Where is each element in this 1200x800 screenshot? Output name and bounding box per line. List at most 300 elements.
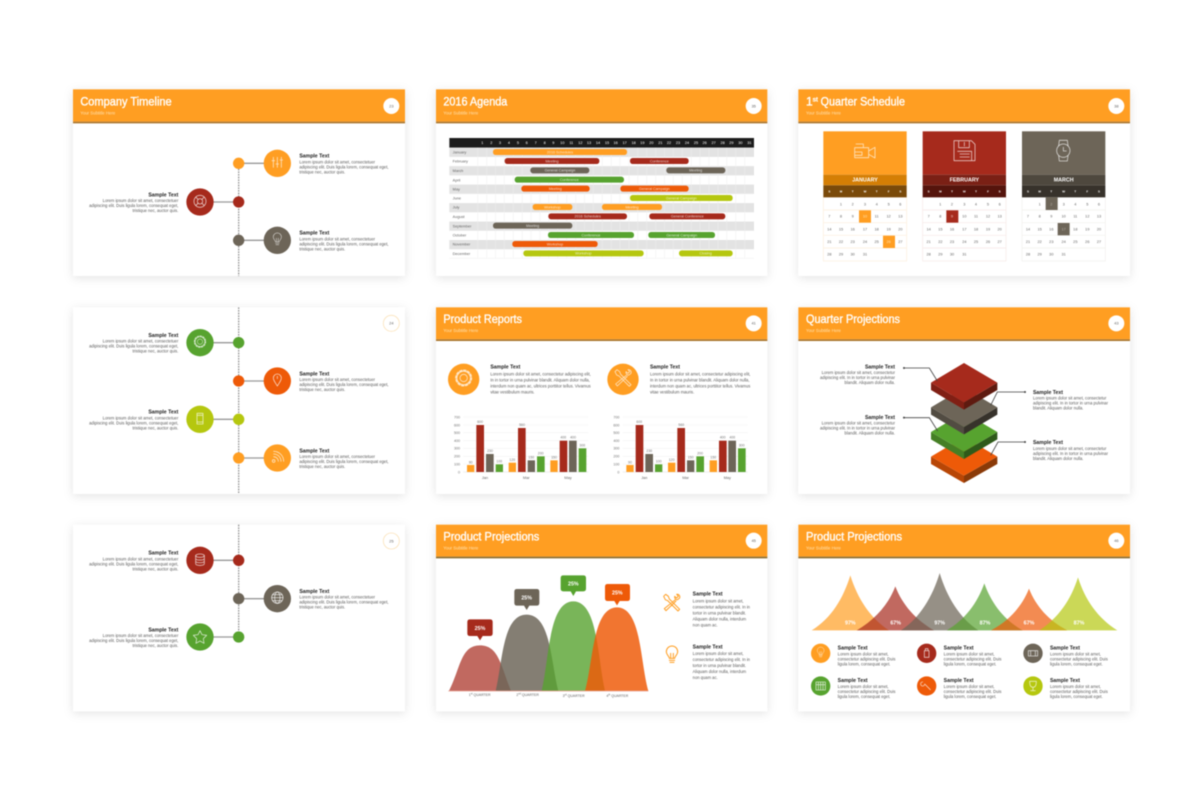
peak chart: 67% — [1024, 621, 1035, 627]
calendar: january: 6 — [899, 202, 901, 206]
gantt day numbers: 25 — [694, 141, 698, 145]
layer: green — [931, 412, 997, 459]
gantt day numbers: 28 — [721, 141, 725, 145]
node: gear: tristique nec, auctor quis. — [132, 349, 178, 354]
gantt day numbers: 24 — [685, 141, 690, 145]
text: layer 2: adipiscing elit. In in tortor in urna pulvinar — [1033, 401, 1109, 406]
calendar: february: 15 — [938, 227, 942, 231]
bar chart right: Mar — [682, 476, 690, 480]
bar chart right: 500 — [613, 431, 619, 435]
bar chart right: May — [724, 476, 731, 480]
text: layer 1: blandit. Aliquam dolor nulla. — [845, 380, 895, 385]
calendar: february: 5 — [987, 202, 989, 206]
feature: bulb icon and text: Sample Text — [693, 644, 723, 650]
calendar: march: 20 — [1097, 227, 1101, 231]
node: life ring: Sample Text — [148, 192, 179, 198]
gantt day numbers: 26 — [703, 141, 707, 145]
gantt month labels: May — [453, 187, 460, 191]
text: layer 3: Lorem ipsum dolor sit amet, consectetur — [822, 421, 895, 426]
item: trophy — [1023, 676, 1108, 699]
gantt month labels: July — [453, 206, 460, 210]
calendar: february: 9 — [951, 215, 953, 219]
calendar: february — [923, 131, 1006, 261]
gantt month labels: February — [453, 160, 468, 164]
node: wifi: adipiscing elit. Duis ligula lorem, consequat eget, — [299, 459, 389, 464]
calendar: january: 28 — [827, 253, 831, 257]
calendar: january: 1 — [840, 202, 842, 206]
feature: gear — [448, 364, 591, 395]
header: product projections: Your Subtitle Here — [443, 545, 479, 550]
calendar: january: 31 — [863, 253, 867, 257]
node: wifi: Lorem ipsum dolor sit amet, consectetuer — [299, 454, 375, 459]
header: 2016 agenda: Your Subtitle Here — [443, 111, 479, 116]
text: layer 4 — [1033, 440, 1109, 461]
node: life ring: adipiscing elit. Duis ligula lorem, consequat eget, — [89, 203, 178, 208]
page number 24 — [383, 315, 399, 331]
calendar: february: 31 — [962, 253, 966, 257]
header: product projections: Product Projections — [443, 529, 539, 543]
bar chart left: 300 — [454, 447, 460, 451]
header: product projections — [798, 525, 1130, 558]
calendar: january: 7 — [828, 215, 830, 219]
item: bottle: Lorem ipsum dolor sit amet, — [944, 651, 995, 656]
item: key: consectetur adipiscing elit. Duis — [944, 689, 1001, 694]
calendar: january: S — [899, 190, 901, 194]
text: layer 3: adipiscing elit. In in tortor in urna pulvinar — [820, 426, 896, 431]
bar chart right: 700 — [613, 415, 619, 419]
calendar: january: T — [876, 190, 878, 194]
header: product projections — [436, 525, 767, 558]
gantt day numbers: 2 — [490, 141, 492, 145]
bar chart right: 150 — [710, 455, 716, 459]
quarter labels: 2 — [516, 693, 518, 697]
peak chart: 97% — [934, 621, 945, 627]
calendar: january: 16 — [851, 227, 855, 231]
header: quarter projections: 43 — [1114, 321, 1119, 326]
gantt day numbers: 9 — [552, 141, 554, 145]
calendar: march: MARCH — [1054, 178, 1074, 184]
calendar: january: 25 — [875, 240, 879, 244]
gantt day numbers — [481, 141, 751, 145]
feature: tools icon and text — [664, 592, 751, 627]
quarter labels: th — [608, 694, 611, 697]
header: 2016 agenda: 2016 Agenda — [443, 94, 508, 108]
item: bottle: consectetur adipiscing elit. Duis — [944, 656, 1001, 661]
node: location pin: Lorem ipsum dolor sit amet, consectetuer — [299, 377, 375, 382]
calendar: february: 23 — [950, 240, 954, 244]
peak chart: 87% — [980, 621, 991, 627]
calendar: february: 20 — [998, 227, 1002, 231]
node: life ring: Lorem ipsum dolor sit amet, consectetuer — [103, 198, 178, 203]
calendar: march: 28 — [1026, 253, 1030, 257]
text: layer 1: adipiscing elit. In in tortor in urna pulvinar — [820, 375, 896, 380]
quarter labels: QUARTER — [521, 693, 539, 697]
panel: product projections peaks — [798, 525, 1130, 711]
bar chart left — [454, 415, 588, 480]
calendar: march: 3 — [1063, 202, 1065, 206]
gantt day numbers: 4 — [508, 141, 511, 145]
bar chart right: 400 — [729, 436, 735, 440]
bar chart right: 600 — [636, 420, 642, 424]
node: phone: Lorem ipsum dolor sit amet, consectetuer — [103, 415, 178, 420]
bell curve chart — [448, 601, 648, 691]
gantt day numbers: 12 — [578, 141, 582, 145]
calendar: february: 30 — [950, 253, 954, 257]
header: company timeline: Your Subtitle Here — [80, 111, 116, 116]
bar chart left: 120 — [509, 458, 515, 462]
calendar: march: 29 — [1038, 253, 1042, 257]
gantt day numbers: 6 — [526, 141, 528, 145]
bar chart right: 300 — [613, 447, 619, 451]
bar chart right — [613, 415, 748, 480]
calendar: february: 22 — [938, 240, 942, 244]
callout lines — [903, 367, 1026, 455]
bar chart right: 300 — [739, 444, 745, 448]
calendar: february: S — [999, 190, 1001, 194]
calendar: february: 19 — [986, 227, 990, 231]
peak chart: 97% — [845, 621, 856, 627]
gantt chart — [449, 138, 754, 258]
gantt month labels: August — [453, 215, 466, 219]
bar chart right: 200 — [613, 455, 619, 459]
node: bulb: tristique nec, auctor quis. — [299, 246, 345, 251]
quarter labels: QUARTER — [610, 694, 629, 698]
gantt bars — [493, 149, 733, 256]
feature: tools: interdum non quam ac, ultrices porttitor tellus. Vivamus — [650, 383, 750, 388]
bar chart left: 0 — [458, 470, 460, 474]
calendar: march: 13 — [1097, 215, 1101, 219]
item: calendar: consectetur adipiscing elit. Duis — [838, 689, 895, 694]
feature: tools: Sample Text — [650, 365, 680, 371]
item: bulb: consectetur adipiscing elit. Duis — [838, 656, 895, 661]
timeline spine — [237, 163, 241, 276]
node: bulb — [233, 227, 389, 254]
calendar: january: W — [864, 190, 867, 194]
calendar: january: 15 — [839, 227, 843, 231]
calendar: february: 27 — [998, 240, 1002, 244]
node: bulb: Sample Text — [299, 231, 330, 237]
calendar: january — [823, 131, 907, 261]
gantt day numbers: 23 — [676, 141, 680, 145]
calendar: january: 26 — [887, 240, 891, 244]
header: product projections: 46 — [1114, 538, 1119, 543]
calendar: january: 21 — [827, 240, 831, 244]
item: bulb — [811, 644, 895, 666]
calendar: march: 25 — [1073, 240, 1077, 244]
node: sliders: adipiscing elit. Duis ligula lorem, consequat eget, — [299, 164, 389, 169]
panel: 1st quarter schedule — [798, 89, 1130, 276]
page number 25: 25 — [389, 538, 394, 543]
feature: bulb icon and text: consectetur adipiscing elit. In in — [693, 657, 751, 662]
calendar: february: M — [939, 190, 942, 194]
calendar: february: 26 — [986, 240, 990, 244]
calendar: march: 4 — [1074, 202, 1077, 206]
callout: q3 — [561, 575, 586, 596]
bar chart right: 560 — [678, 423, 684, 427]
calendar: january: 10 — [863, 215, 867, 219]
calendar: january: 13 — [898, 215, 902, 219]
quarter labels: nd — [518, 694, 522, 696]
gantt bars: Meeting — [526, 224, 539, 228]
header: quarter schedule: 38 — [1114, 103, 1119, 108]
feature: tools icon and text: Aliquam dolor nulla, interdum — [693, 616, 747, 621]
calendar: january: 11 — [875, 215, 879, 219]
calendar: january: M — [840, 190, 843, 194]
callout: q2 — [514, 589, 539, 610]
item: calendar — [811, 676, 895, 699]
bar chart left: 500 — [454, 431, 460, 435]
quarter labels: rd — [565, 694, 567, 697]
callout: q1 — [467, 619, 493, 640]
gantt day numbers: 1 — [481, 141, 483, 145]
calendar: february: S — [928, 190, 930, 194]
header: company timeline: 23 — [389, 103, 394, 108]
gantt month labels: December — [453, 252, 471, 256]
panel: product projections curves — [436, 525, 767, 711]
calendar: march — [1022, 131, 1105, 261]
calendar: january: 20 — [898, 227, 902, 231]
calendar: february: 12 — [986, 215, 990, 219]
feature: tools — [607, 364, 750, 395]
calendar: march: 21 — [1026, 240, 1030, 244]
gantt day numbers: 3 — [499, 141, 501, 145]
gantt month labels: October — [453, 234, 467, 238]
quarter labels: 4 — [606, 694, 608, 698]
calendar: march: T — [1050, 190, 1052, 194]
header: quarter schedule: Quarter Schedule — [821, 94, 905, 108]
callout: q3: 25% — [568, 582, 579, 588]
calendar: february: 10 — [962, 215, 966, 219]
bar chart left: 300 — [579, 444, 585, 448]
feature: bulb icon and text: Lorem ipsum dolor sit amet, — [693, 651, 744, 656]
calendar: march: 12 — [1085, 215, 1089, 219]
text: layer 4: blandit. Aliquam dolor nulla. — [1033, 456, 1083, 461]
bar chart right: 600 — [613, 423, 619, 427]
gantt day numbers: 5 — [517, 141, 519, 145]
header: 2016 agenda: 35 — [751, 103, 757, 108]
gantt month labels: September — [453, 224, 472, 228]
node: life ring: tristique nec, auctor quis. — [132, 208, 178, 213]
text: layer 1: Lorem ipsum dolor sit amet, consectetur — [822, 370, 895, 375]
node: globe: Sample Text — [299, 589, 330, 595]
bar chart right: 0 — [617, 470, 619, 474]
item: key: ligula lorem, consequat eget. — [944, 694, 996, 699]
gantt day numbers: 8 — [544, 141, 546, 145]
gantt bars: General Campaign — [666, 196, 697, 200]
calendar: february: 25 — [974, 240, 978, 244]
icon: watch — [1057, 140, 1070, 161]
calendar: february: FEBRUARY — [950, 178, 979, 184]
calendar: march: 1 — [1039, 202, 1041, 206]
bar chart right: Jan — [641, 476, 647, 480]
feature: bulb icon and text — [666, 644, 751, 680]
calendar: march: 26 — [1085, 240, 1089, 244]
item: bulb: Sample Text — [838, 645, 868, 651]
calendar: february: 17 — [962, 227, 966, 231]
calendar: february: 21 — [927, 240, 931, 244]
calendar: march: S — [1027, 190, 1029, 194]
quarter labels: 3 — [563, 694, 565, 698]
bar chart left: 230 — [487, 449, 493, 453]
calendar: february: 24 — [962, 240, 967, 244]
header: quarter schedule: Your Subtitle Here — [806, 111, 842, 116]
bar chart left: 400 — [560, 436, 566, 440]
gantt day numbers: 30 — [738, 141, 742, 145]
calendar: february: 16 — [950, 227, 954, 231]
gantt day numbers: 31 — [747, 141, 751, 145]
calendar: february: F — [987, 190, 989, 194]
calendar: february: W — [963, 190, 966, 194]
gantt bars: Workshop — [544, 205, 561, 209]
calendar: march: 7 — [1027, 215, 1029, 219]
calendar: january: 3 — [864, 202, 866, 206]
calendar: february: T — [975, 190, 977, 194]
calendar: march: 31 — [1062, 253, 1066, 257]
node: gear — [89, 329, 244, 356]
feature: tools: vitae vestibulum mauris. — [650, 389, 694, 394]
text: layer 4: Sample Text — [1033, 440, 1063, 446]
calendar: march: 8 — [1039, 215, 1041, 219]
item: key — [917, 676, 1001, 699]
bar chart left: 150 — [551, 455, 557, 459]
calendar: march: 16 — [1049, 227, 1053, 231]
feature: tools icon and text: Lorem ipsum dolor sit amet, — [693, 598, 744, 603]
node: star: adipiscing elit. Duis ligula lorem, consequat eget, — [89, 638, 178, 643]
bar chart right: 400 — [720, 436, 726, 440]
calendar: january: 2 — [852, 202, 854, 206]
gantt bars: Conference — [560, 178, 579, 182]
header: quarter schedule: st — [813, 96, 818, 103]
bar chart left: Mar — [523, 476, 530, 480]
text: layer 2: Sample Text — [1033, 390, 1063, 396]
header: quarter schedule — [798, 89, 1130, 123]
calendar: february: 3 — [963, 202, 965, 206]
bar chart left: 560 — [519, 423, 525, 427]
bar chart left: 700 — [454, 415, 460, 419]
layer: taupe — [931, 388, 997, 434]
header: quarter schedule: 1 — [806, 94, 813, 108]
text: layer 3 — [820, 415, 896, 436]
feature: bulb icon and text: non quam ac. — [693, 675, 718, 680]
gantt day numbers: 14 — [596, 141, 601, 145]
peak chart — [812, 573, 1117, 630]
peak chart: 67% — [890, 621, 901, 627]
item: cash: ligula lorem, consequat eget. — [1050, 661, 1103, 666]
calendar: march: W — [1062, 190, 1065, 194]
header: product reports: Product Reports — [443, 312, 522, 326]
calendar: february: 28 — [927, 253, 931, 257]
gantt day numbers: 16 — [614, 141, 618, 145]
item: bottle — [917, 644, 1001, 666]
calendar: march: 17 — [1062, 227, 1066, 231]
node: star: tristique nec, auctor quis. — [132, 643, 178, 648]
bar chart left: May — [564, 476, 572, 480]
gantt day numbers: 19 — [640, 141, 644, 145]
bar chart left: 200 — [538, 451, 544, 455]
node: gear: Lorem ipsum dolor sit amet, consectetuer — [103, 339, 178, 344]
calendar: january: 19 — [887, 227, 891, 231]
quarter labels: QUARTER — [567, 694, 585, 698]
calendar: march: 18 — [1073, 227, 1077, 231]
calendar: march: T — [1074, 190, 1076, 194]
item: bottle: ligula lorem, consequat eget. — [944, 661, 996, 666]
bar chart left: 100 — [496, 460, 502, 464]
node: database: tristique nec, auctor quis. — [132, 566, 178, 571]
gantt day numbers: 13 — [587, 141, 591, 145]
calendar: march: 2 — [1050, 202, 1052, 206]
node: wifi: Sample Text — [299, 448, 330, 454]
text: layer 1: Sample Text — [865, 364, 895, 370]
callout: q4 — [605, 584, 630, 605]
page number 25 — [383, 533, 399, 549]
node: phone: Sample Text — [148, 410, 179, 416]
calendar: february: 13 — [998, 215, 1002, 219]
header: quarter projections — [798, 307, 1130, 341]
calendar: march: 24 — [1062, 240, 1067, 244]
node: bulb: adipiscing elit. Duis ligula lorem, consequat eget, — [299, 241, 389, 246]
feature: gear: interdum non quam ac, ultrices porttitor tellus. Vivamus — [490, 383, 591, 388]
gantt day numbers: 7 — [535, 141, 537, 145]
calendar: february: 7 — [928, 215, 930, 219]
node: database: Lorem ipsum dolor sit amet, consectetuer — [103, 556, 178, 561]
calendar: february: 1 — [939, 202, 941, 206]
text: layer 2 — [1033, 390, 1109, 411]
timeline spine — [237, 307, 241, 494]
node: star: Sample Text — [148, 627, 179, 633]
calendar: january: 24 — [863, 240, 868, 244]
calendar: march: M — [1038, 190, 1041, 194]
header: product projections: 45 — [751, 538, 757, 543]
icon: floppy disk — [954, 141, 975, 161]
gantt bars: Meeting — [545, 159, 559, 163]
node: database — [89, 547, 244, 574]
gantt month labels: March — [453, 169, 463, 173]
calendar: march: 14 — [1026, 227, 1031, 231]
layer: orange — [931, 437, 997, 483]
gantt day numbers: 17 — [623, 141, 627, 145]
bar chart right: 100 — [656, 460, 662, 464]
gantt bars: General Conference — [671, 215, 704, 219]
calendar: march: 11 — [1073, 215, 1077, 219]
calendar: january: 4 — [876, 202, 879, 206]
gantt bars: Closing — [700, 252, 712, 256]
gantt day numbers: 18 — [632, 141, 636, 145]
calendar: february: 2 — [951, 202, 953, 206]
text: layer 3: blandit. Aliquam dolor nulla. — [845, 431, 895, 436]
text: layer 2: blandit. Aliquam dolor nulla. — [1033, 406, 1083, 411]
gantt bars: 2016 Schedules — [575, 215, 601, 219]
item: cash: Sample Text — [1050, 645, 1080, 651]
feature: bulb icon and text: Aliquam dolor nulla, interdum — [693, 669, 747, 674]
page number 24: 24 — [389, 321, 394, 326]
node: sliders: Sample Text — [299, 154, 330, 160]
item: key: Lorem ipsum dolor sit amet, — [944, 684, 995, 689]
calendar: february: 14 — [927, 227, 932, 231]
gantt day numbers: 27 — [712, 141, 716, 145]
item: calendar: ligula lorem, consequat eget. — [838, 694, 890, 699]
text: layer 3: Sample Text — [865, 415, 895, 421]
timeline spine — [237, 525, 241, 637]
calendar: january: 23 — [851, 240, 855, 244]
calendar: january: 12 — [887, 215, 891, 219]
node: database: Sample Text — [148, 551, 179, 557]
calendar: february: 11 — [974, 215, 978, 219]
calendar: march: F — [1086, 190, 1088, 194]
gantt bars: General Campaign — [666, 233, 697, 237]
panel: 2016 agenda — [436, 89, 767, 276]
icon: video camera — [855, 144, 875, 158]
calendar: january: 27 — [898, 240, 902, 244]
